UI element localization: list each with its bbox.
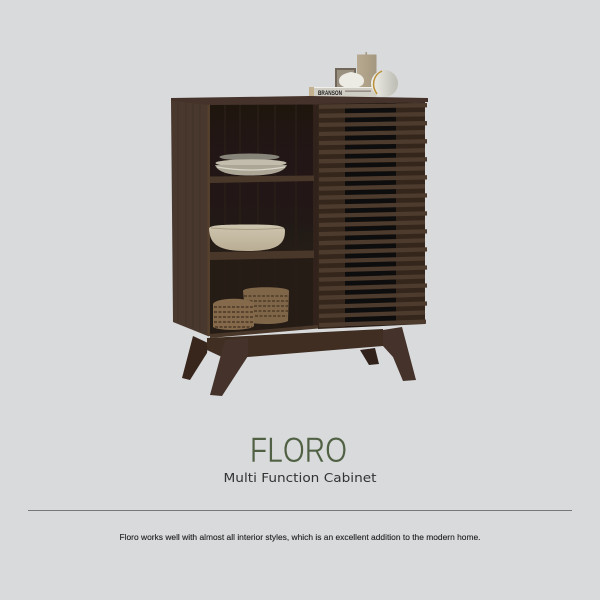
round vase xyxy=(339,72,364,88)
plates xyxy=(215,154,287,176)
back legs xyxy=(182,336,379,380)
shelf lower xyxy=(210,250,314,260)
title: FLORO xyxy=(250,431,347,470)
divider line xyxy=(28,510,572,511)
door dark centre xyxy=(345,103,396,327)
cabinet floor xyxy=(210,325,318,338)
candle xyxy=(357,52,376,88)
baskets xyxy=(213,287,289,330)
book: BRANSON xyxy=(318,90,342,97)
side panel xyxy=(171,100,210,336)
shelf interior grain xyxy=(225,105,296,332)
apron xyxy=(207,329,383,358)
subtitle: Multi Function Cabinet xyxy=(224,471,377,485)
sliding slatted door xyxy=(318,102,427,329)
leg: front right xyxy=(383,327,416,381)
bowl xyxy=(209,224,285,251)
basket: back xyxy=(243,287,289,324)
leg: back right xyxy=(360,348,379,365)
cabinet illustration xyxy=(171,52,428,396)
leg: front left xyxy=(210,338,248,396)
middle partition xyxy=(313,103,318,328)
description: Floro works well with almost all interior styles, which is an excellent addition to the modern home. xyxy=(120,533,480,542)
cabinet top xyxy=(171,96,428,105)
leg: back left xyxy=(182,336,208,380)
door backing xyxy=(318,102,425,329)
door slats xyxy=(319,105,427,325)
decor on top of cabinet xyxy=(309,52,398,97)
shelf upper xyxy=(210,176,314,183)
picture frame xyxy=(335,68,356,89)
basket: front xyxy=(213,299,254,330)
cabinet interior xyxy=(209,103,318,336)
sphere ornament xyxy=(371,70,398,97)
